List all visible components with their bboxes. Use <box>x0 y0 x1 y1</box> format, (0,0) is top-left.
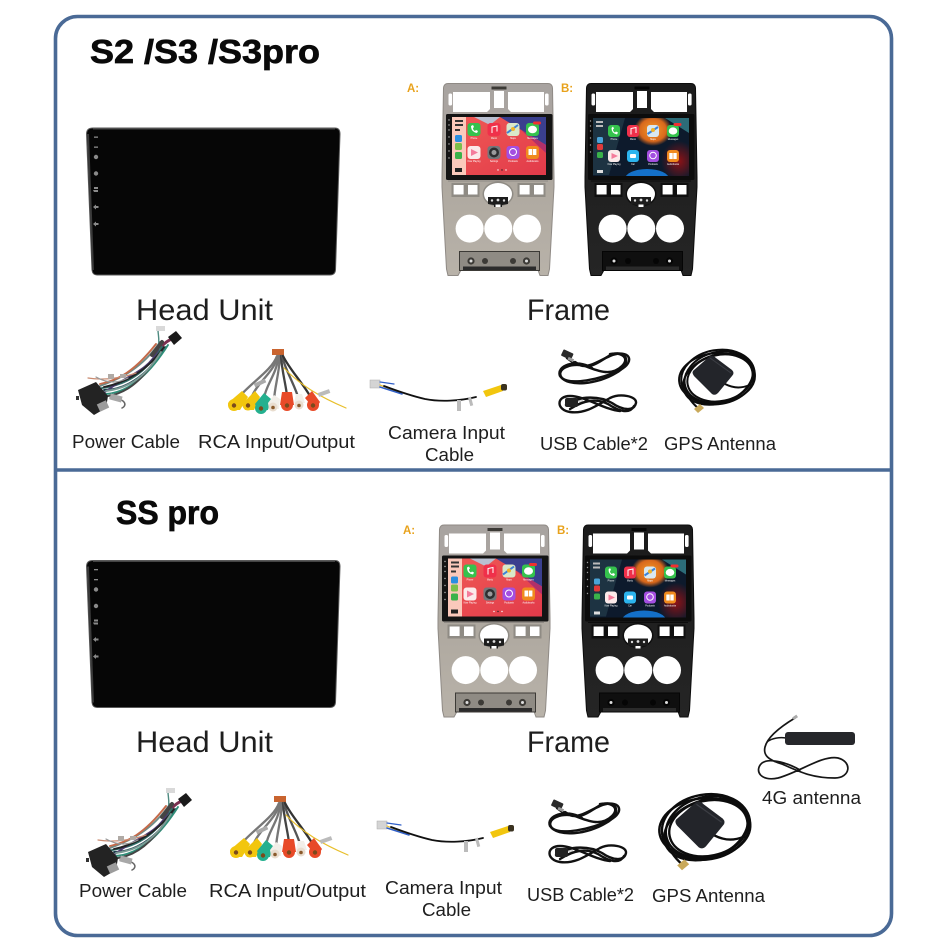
frame B black <box>582 525 694 717</box>
panel: S2 /S3 /S3pro <box>72 33 777 465</box>
label: RCA Input/Output: RCA Input/Output <box>209 880 366 901</box>
label: Camera Input Cable: Camera Input <box>385 877 502 898</box>
heading: Head Unit: Head Unit <box>136 294 273 327</box>
label: Camera Input Cable: Camera Input <box>388 422 505 443</box>
icon: power cable <box>76 326 182 415</box>
label: RCA Input/Output: RCA Input/Output <box>198 431 355 452</box>
label: Camera Input Cable <box>385 877 502 920</box>
heading: Frame: Frame <box>527 726 610 759</box>
frame B black <box>585 84 697 276</box>
label: A: A: <box>407 83 419 95</box>
label: USB Cable*2: USB Cable*2 <box>527 884 634 905</box>
label: GPS Antenna: GPS Antenna <box>664 433 777 454</box>
icon: RCA cable <box>230 796 348 861</box>
label: Power Cable: Power Cable <box>72 431 180 452</box>
icon: USB cables <box>559 349 636 412</box>
label: B: B: <box>561 83 573 95</box>
frame A silver <box>442 84 554 276</box>
icon: USB cables <box>549 799 626 862</box>
icon: camera cable <box>370 380 507 411</box>
label: A: A: <box>403 525 415 537</box>
label: Camera Input Cable: Cable <box>422 899 471 920</box>
heading: Frame: Frame <box>527 294 610 327</box>
title: S2 /S3 /S3pro: S2 /S3 /S3pro <box>90 33 320 70</box>
frame A silver <box>438 525 550 717</box>
label: 4G antenna: 4G antenna <box>762 787 862 808</box>
head unit image <box>86 128 340 275</box>
icon: power cable <box>86 788 192 877</box>
title: SS pro: SS pro <box>116 494 219 531</box>
icon: 4G antenna <box>759 715 855 779</box>
heading: Head Unit: Head Unit <box>136 726 273 759</box>
label: B: B: <box>557 525 569 537</box>
icon: GPS antenna <box>656 787 756 871</box>
label: Camera Input Cable <box>388 422 505 465</box>
icon: RCA cable <box>228 349 346 414</box>
panel: SS pro <box>79 494 862 920</box>
label: USB Cable*2: USB Cable*2 <box>540 433 648 454</box>
icon: camera cable <box>377 821 514 852</box>
icon: GPS antenna <box>676 344 760 414</box>
label: GPS Antenna: GPS Antenna <box>652 885 766 906</box>
label: Power Cable: Power Cable <box>79 880 187 901</box>
label: Camera Input Cable: Cable <box>425 444 474 465</box>
head unit image <box>86 560 340 708</box>
